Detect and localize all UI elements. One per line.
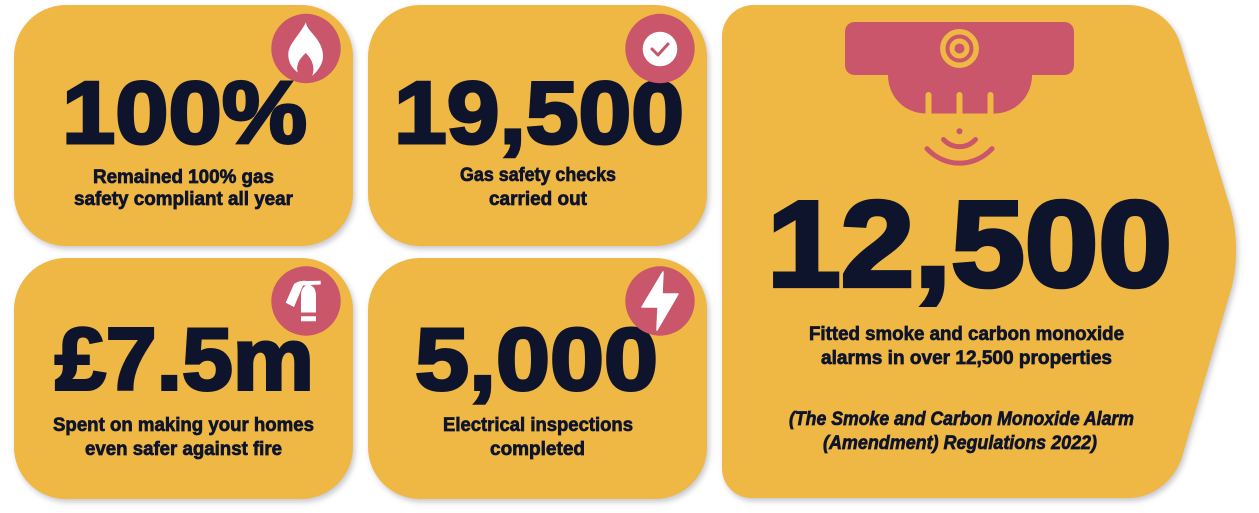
stat: 100%: 100% (62, 63, 307, 162)
text: inspections description: completed (490, 438, 585, 460)
text: inspections description: Electrical inspections (443, 414, 633, 436)
text: regulations note: (Amendment) Regulations 2022) (823, 432, 1097, 454)
text: gas compliance description: safety compliant all year (74, 188, 293, 210)
text: spend description: Spent on making your homes (53, 414, 314, 436)
icon: flame (271, 14, 341, 83)
text: gas compliance description (74, 166, 293, 210)
stat: 19,500: 19,500 (394, 63, 684, 162)
icon: fire extinguisher (271, 266, 341, 336)
text: inspections description (443, 414, 633, 460)
panel: electrical inspections (368, 258, 707, 499)
stat: 5,000: 5,000 (415, 310, 658, 408)
text: alarms description: Fitted smoke and carbon monoxide (809, 323, 1124, 345)
panel: smoke and carbon monoxide alarms (722, 5, 1236, 498)
text: alarms description: alarms in over 12,500 properties (821, 347, 1112, 369)
text: regulations note: (The Smoke and Carbon Monoxide Alarm (789, 408, 1134, 430)
text: regulations note (789, 408, 1134, 454)
panel: gas safety compliance (14, 5, 353, 246)
text: spend description (53, 414, 314, 460)
stat: 12,500: 12,500 (767, 176, 1172, 312)
text: gas compliance description: Remained 100% gas (93, 166, 274, 188)
text: gas checks description (460, 164, 616, 210)
icon: check mark (625, 14, 695, 83)
icon: lightning bolt (625, 266, 695, 336)
panel: gas safety checks (368, 5, 707, 246)
text: gas checks description: carried out (489, 188, 587, 210)
stat: £7.5m: £7.5m (55, 310, 314, 408)
text: alarms description (809, 323, 1124, 369)
text: spend description: even safer against fire (85, 438, 282, 460)
icon: smoke alarm (845, 22, 1074, 163)
text: gas checks description: Gas safety checks (460, 164, 616, 186)
panel: fire safety spend (14, 258, 353, 499)
